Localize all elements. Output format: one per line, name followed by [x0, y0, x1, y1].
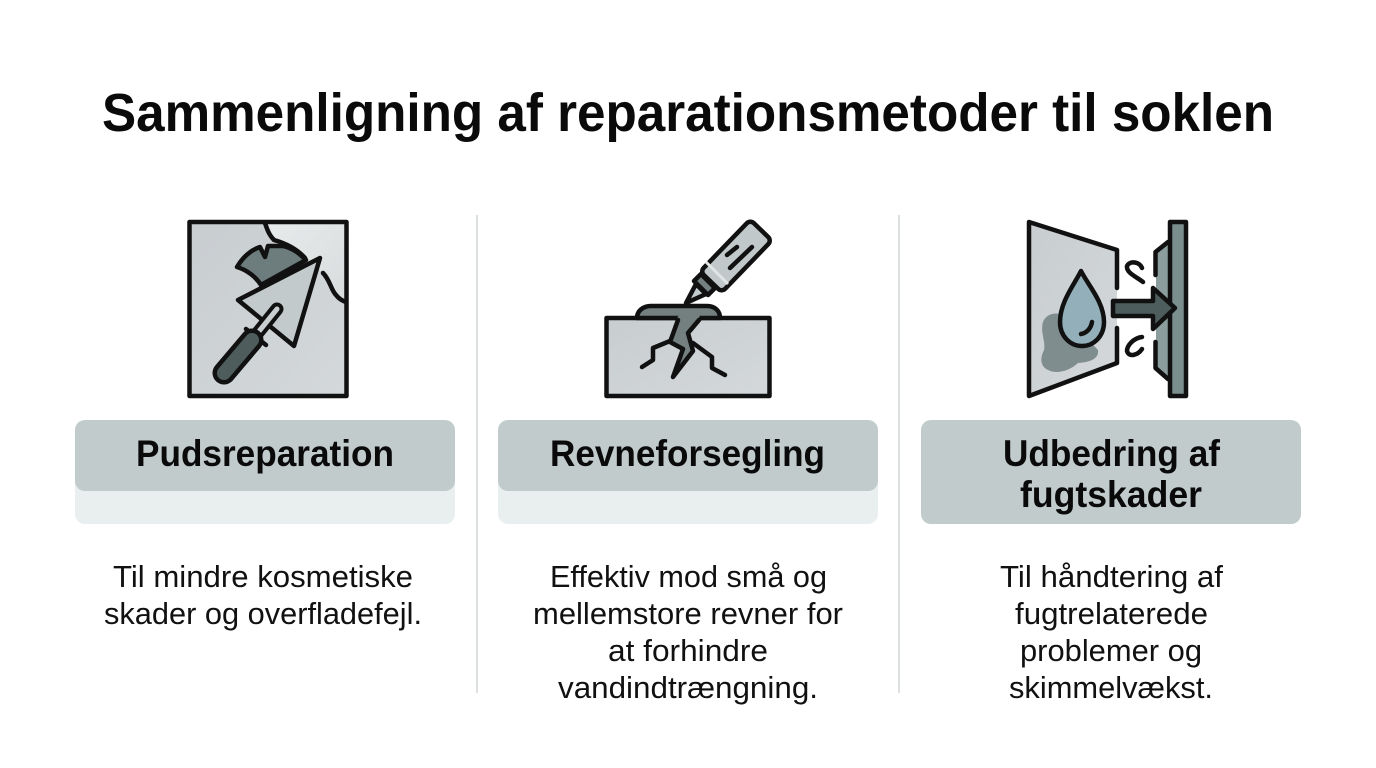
- title: Sammenligning af reparationsmetoder til soklen: [102, 83, 1274, 143]
- text: Udbedring af fugtskader description: fugtrelaterede: [1015, 596, 1208, 631]
- text: Revneforsegling description: [533, 559, 843, 705]
- card: Pudsreparation heading: [75, 420, 455, 524]
- panel: Udbedring af fugtskader: [921, 222, 1301, 705]
- text: Udbedring af fugtskader description: Til håndtering af: [1000, 559, 1223, 594]
- text: Revneforsegling description: at forhindre: [608, 633, 768, 668]
- panel: Pudsreparation: [75, 222, 455, 631]
- card: Udbedring af fugtskader heading: [921, 420, 1301, 524]
- icon: sealant tube filling a crack: [606, 220, 772, 396]
- card: Revneforsegling heading: Revneforsegling: [550, 433, 825, 474]
- card: Udbedring af fugtskader heading: Udbedring af: [1003, 433, 1221, 474]
- text: Revneforsegling description: vandindtrængning.: [558, 670, 818, 705]
- text: Pudsreparation description: skader og overfladefejl.: [104, 596, 422, 631]
- text: Udbedring af fugtskader description: [1000, 559, 1223, 705]
- text: Revneforsegling description: Effektiv mod små og: [550, 559, 827, 594]
- icon: water drop pushing through wall: [1029, 222, 1186, 396]
- text: Revneforsegling description: mellemstore revner for: [533, 596, 843, 631]
- card: Revneforsegling heading: [498, 420, 878, 524]
- icon: trowel on damaged plaster: [190, 222, 346, 396]
- text: Udbedring af fugtskader description: problemer og: [1020, 633, 1202, 668]
- text: Pudsreparation description: Til mindre kosmetiske: [113, 559, 413, 594]
- card: Udbedring af fugtskader heading: fugtskader: [1020, 474, 1202, 515]
- panel: Revneforsegling: [498, 220, 878, 705]
- card: Pudsreparation heading: Pudsreparation: [136, 433, 394, 474]
- text: Udbedring af fugtskader description: skimmelvækst.: [1009, 670, 1213, 705]
- text: Pudsreparation description: [104, 559, 422, 631]
